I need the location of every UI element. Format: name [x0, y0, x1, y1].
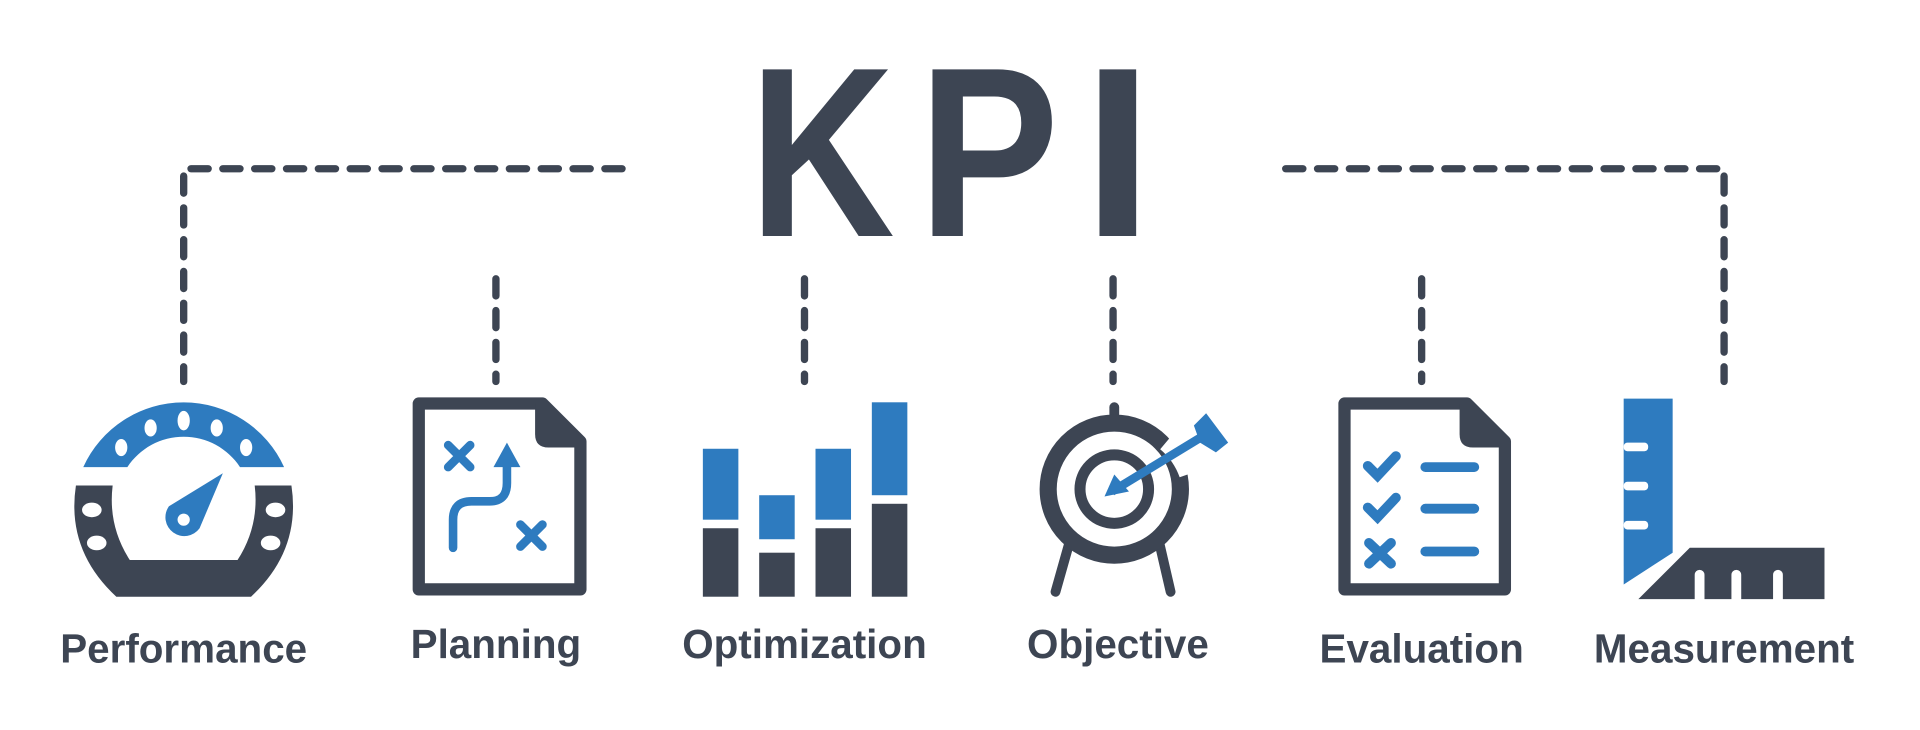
icon: evaluation checklist [1344, 404, 1505, 589]
title [749, 17, 1153, 288]
label: Optimization: Optimization [682, 621, 927, 667]
title: I [1082, 17, 1153, 288]
label: Objective: Objective [1027, 621, 1209, 667]
label: Planning: Planning [411, 621, 581, 667]
label: Evaluation: Evaluation [1320, 626, 1524, 672]
icon: speedometer [74, 402, 293, 597]
icon: target [1048, 402, 1228, 592]
title: P [918, 17, 1059, 288]
icon: planning map [419, 404, 580, 589]
title: K [749, 17, 895, 288]
labels [60, 621, 1854, 672]
icon: measurement ruler [1624, 399, 1824, 599]
label: Performance: Performance [60, 626, 307, 672]
connector lines [184, 169, 1724, 382]
label: Measurement: Measurement [1594, 626, 1854, 672]
icon: bar chart [703, 402, 907, 597]
